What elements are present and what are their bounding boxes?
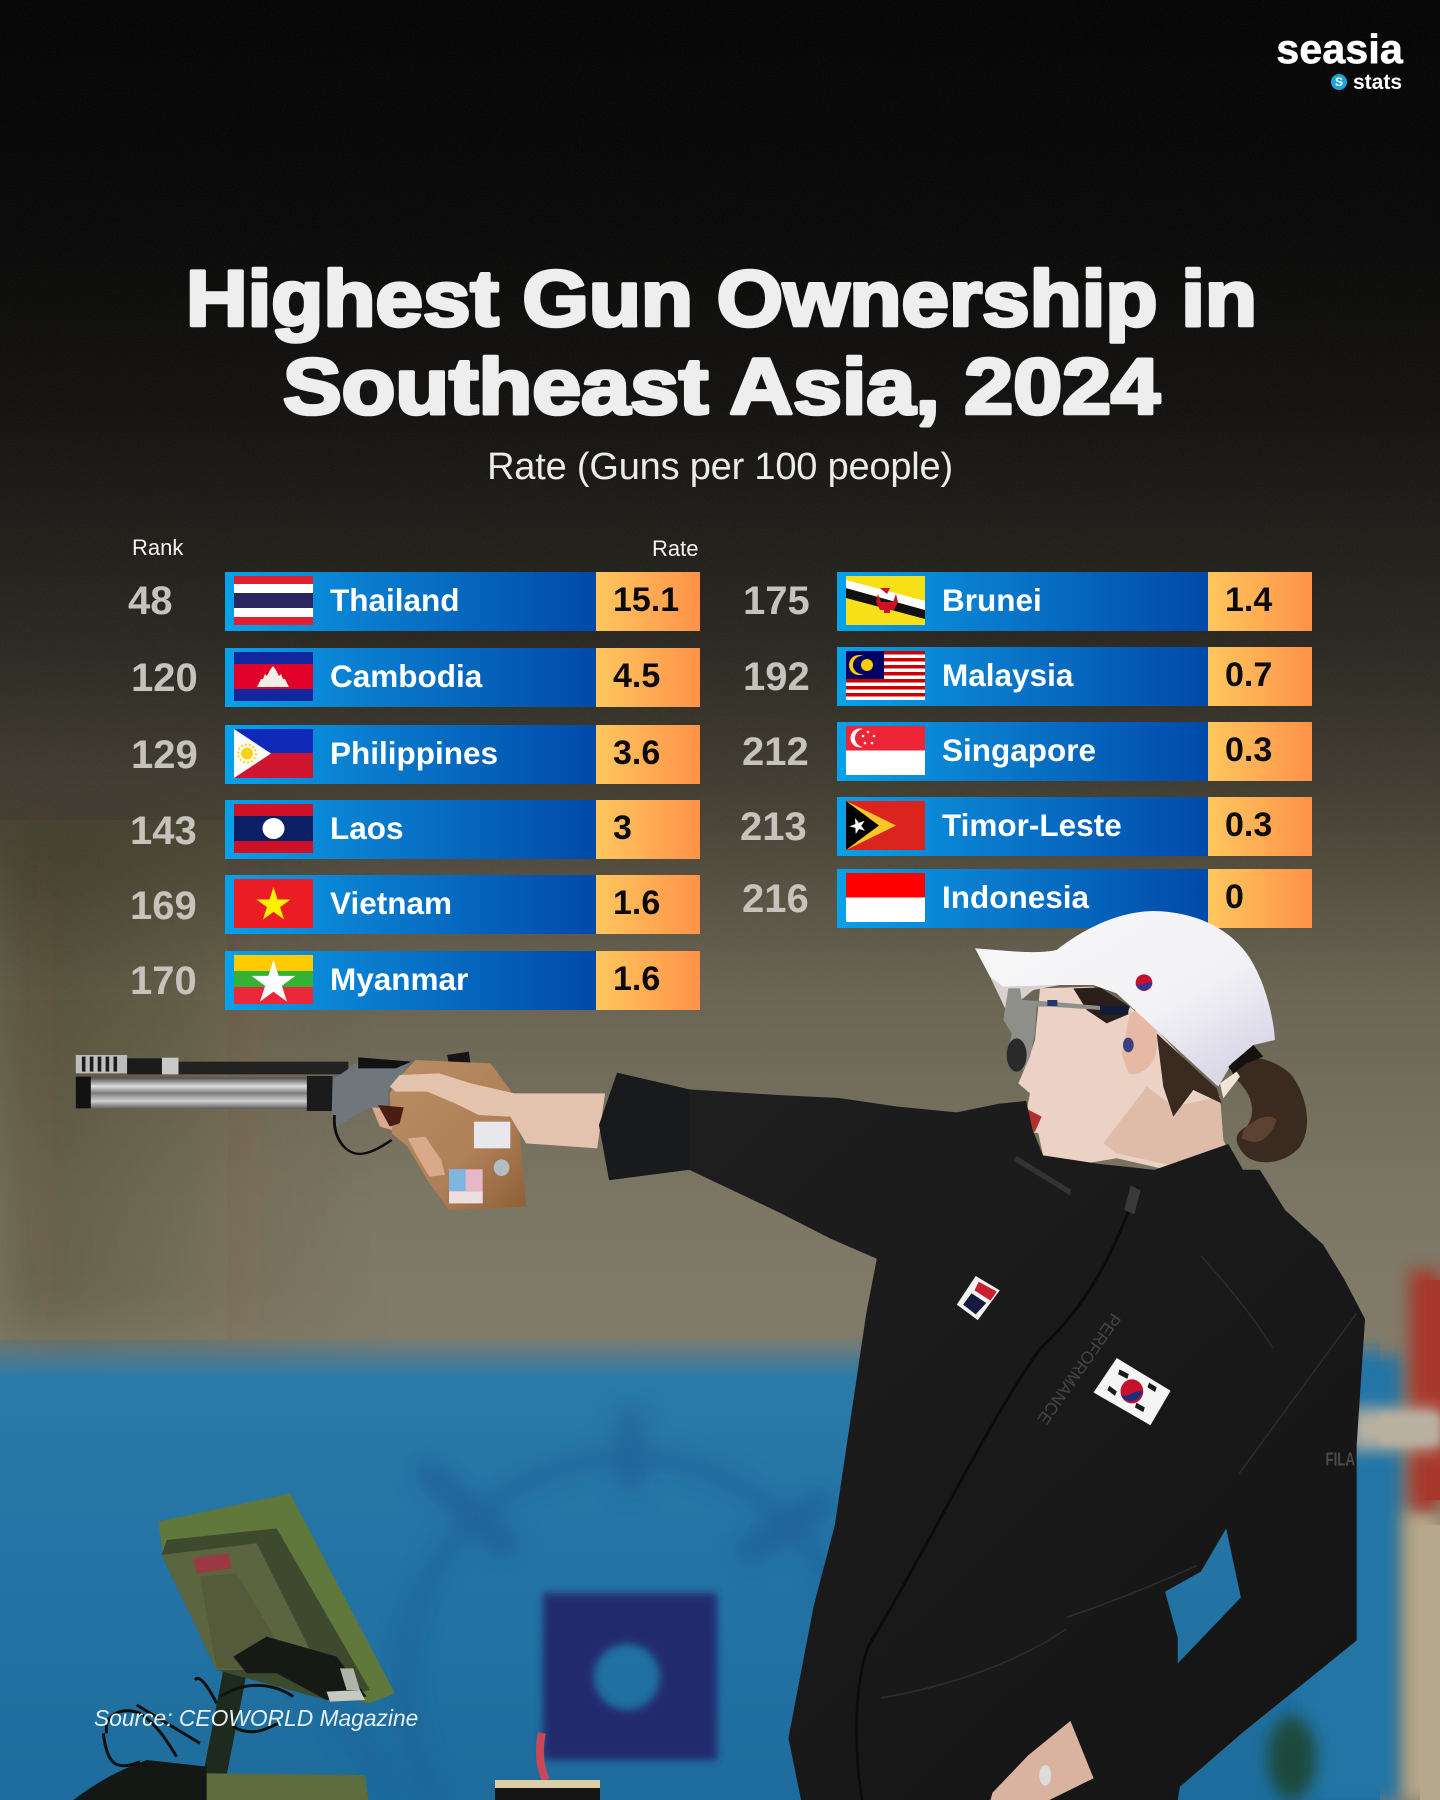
row: Singapore [837, 722, 1312, 781]
row: Indonesia [837, 869, 1312, 928]
rank 169: 169 [130, 884, 197, 928]
cap and glasses [975, 911, 1275, 1098]
flag: Brunei [846, 576, 925, 625]
rank 213: 213 [740, 805, 807, 849]
row: Vietnam [225, 875, 700, 934]
row: Philippines: Philippines [330, 735, 498, 771]
row: Malaysia: 0.7 [1225, 656, 1272, 694]
row: Thailand [225, 572, 700, 631]
brand logo [1276, 26, 1404, 94]
row: Singapore: 0.3 [1225, 731, 1272, 769]
row: Timor-Leste: 0.3 [1225, 806, 1272, 844]
row: Brunei [837, 572, 1312, 631]
row: Cambodia: Cambodia [330, 658, 482, 694]
row: Malaysia [837, 647, 1312, 706]
rank 129: 129 [131, 733, 198, 777]
flag: Myanmar [234, 955, 313, 1004]
athlete figure [599, 911, 1365, 1800]
flag: Laos [234, 804, 313, 853]
lower cylinder [78, 1077, 333, 1109]
upper barrel [178, 1062, 348, 1074]
row: Vietnam: Vietnam [330, 885, 452, 921]
flag: Malaysia [846, 651, 925, 700]
rank 192: 192 [743, 655, 810, 699]
rank 120: 120 [131, 656, 198, 700]
chest flag patch [1094, 1358, 1171, 1425]
zipper and folds [857, 1158, 1357, 1800]
title: Southeast Asia, 2024 [283, 342, 1160, 430]
row: Philippines [225, 725, 700, 784]
sleeve text: FILA [1325, 1449, 1355, 1470]
flag: Singapore [846, 726, 925, 775]
row: Indonesia: 0 [1225, 878, 1244, 916]
pistol [76, 1052, 605, 1210]
row: Laos: 3 [613, 809, 632, 847]
title: Highest Gun Ownership in [186, 254, 1257, 342]
hand [390, 1073, 605, 1148]
row: Indonesia: Indonesia [942, 879, 1089, 915]
row: Cambodia [225, 648, 700, 707]
logo wordmark: seasia [1276, 26, 1403, 72]
row: Timor-Leste [837, 797, 1312, 856]
wood grip [390, 1060, 526, 1210]
row: Myanmar [225, 951, 700, 1010]
frame [332, 1062, 412, 1127]
embossed jacket text: PERFORMANCE [1034, 1310, 1124, 1428]
logo dot [1331, 74, 1347, 90]
row: Myanmar: Myanmar [330, 961, 468, 997]
cuff [599, 1073, 689, 1180]
row: Brunei: Brunei [942, 582, 1042, 618]
row: Malaysia: Malaysia [942, 657, 1073, 693]
row: Cambodia: 4.5 [613, 657, 660, 695]
row: Brunei: 1.4 [1225, 581, 1272, 619]
flag: Indonesia [846, 873, 925, 922]
shooting glasses [1003, 988, 1127, 1070]
rank 48: 48 [128, 579, 172, 623]
jacket [599, 1073, 1365, 1800]
head behind jacket: ponytail, face, hair, ear [1018, 987, 1307, 1177]
row: Singapore: Singapore [942, 732, 1096, 768]
flag: Vietnam [234, 879, 313, 928]
row: Philippines: 3.6 [613, 734, 660, 772]
row: Vietnam: 1.6 [613, 884, 660, 922]
flag: Timor-Leste [846, 801, 925, 850]
rank 212: 212 [742, 730, 809, 774]
cap flag [1117, 960, 1173, 1008]
title [186, 254, 1257, 430]
flag: Philippines [234, 729, 313, 778]
row: Laos: Laos [330, 810, 404, 846]
logo patch [957, 1276, 1000, 1320]
row: Laos [225, 800, 700, 859]
monitor on stand [73, 1493, 395, 1800]
rank 143: 143 [130, 809, 197, 853]
flag: Thailand [234, 576, 313, 625]
hand at hip [990, 1721, 1094, 1800]
logo sub-wordmark: stats [1353, 71, 1402, 94]
row: Myanmar: 1.6 [613, 960, 660, 998]
logo dot: S [1335, 75, 1343, 89]
row: Thailand: Thailand [330, 582, 460, 618]
scoring device with red wire [495, 1733, 600, 1800]
column header: rank: Rank [132, 535, 183, 560]
subtitle: Rate (Guns per 100 people) [487, 446, 953, 488]
column header: rate: Rate [652, 536, 698, 561]
rank 175: 175 [743, 579, 810, 623]
row: Thailand: 15.1 [613, 581, 679, 619]
flag: Cambodia [234, 652, 313, 701]
rank 216: 216 [742, 877, 809, 921]
source note: Source: CEOWORLD Magazine [94, 1705, 418, 1731]
rank 170: 170 [130, 959, 197, 1003]
row: Timor-Leste: Timor-Leste [942, 807, 1122, 843]
